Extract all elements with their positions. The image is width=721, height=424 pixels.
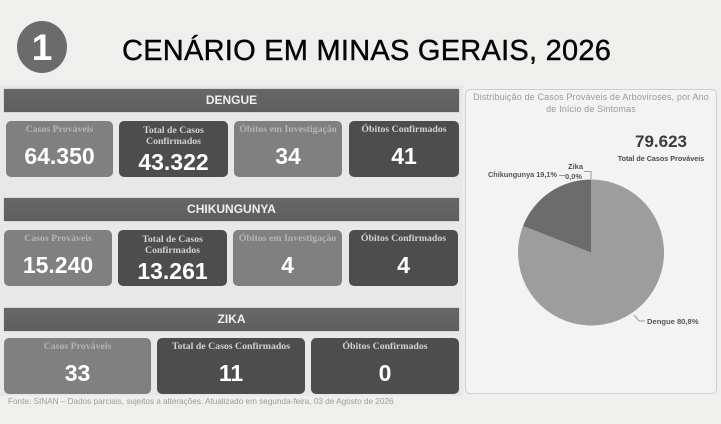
card: total confirmados	[119, 121, 228, 177]
card: óbitos em investigação	[233, 230, 342, 286]
card: casos prováveis: Casos Prováveis	[24, 233, 92, 244]
card: óbitos confirmados	[311, 338, 459, 394]
card: casos prováveis	[4, 338, 151, 394]
slice: dengue	[518, 180, 664, 326]
card: óbitos em investigação: 4	[281, 252, 294, 278]
heading: dengue: DENGUE	[206, 93, 257, 107]
card: casos prováveis: 33	[65, 360, 90, 386]
background band behind dashboard	[0, 85, 463, 396]
card: total confirmados: 43.322	[138, 149, 209, 175]
chart title: de Início de Sintomas	[546, 104, 636, 114]
card: óbitos confirmados: Óbitos Confirmados	[342, 341, 428, 352]
card: total confirmados	[157, 338, 305, 394]
source note: Fonte: SINAN – Dados parciais, sujeitos a alterações. Atualizado em segunda-feira, 03 de Agosto de 2026	[8, 397, 394, 406]
card: casos prováveis: 64.350	[24, 143, 95, 169]
card: total confirmados: Total de Casos	[143, 125, 204, 136]
card: óbitos confirmados: Óbitos Confirmados	[361, 233, 446, 244]
heading: chikungunya: CHIKUNGUNYA	[187, 202, 276, 216]
heading: zika	[4, 308, 459, 331]
heading: dengue	[4, 89, 459, 112]
panel: chikungunya cards	[4, 230, 458, 286]
total value: 79.623	[635, 132, 687, 151]
card: óbitos confirmados	[349, 121, 459, 177]
card: casos prováveis: 15.240	[23, 252, 93, 278]
card: total confirmados: 13.261	[137, 258, 208, 284]
card: óbitos confirmados	[349, 230, 458, 286]
step number badge	[17, 21, 67, 73]
card: óbitos em investigação: Óbitos em Investigação	[239, 124, 337, 135]
card: óbitos confirmados: Óbitos Confirmados	[361, 124, 447, 135]
card: óbitos em investigação: Óbitos em Investigação	[239, 233, 336, 244]
card: total confirmados: Total de Casos	[142, 234, 203, 245]
card: óbitos em investigação	[234, 121, 342, 177]
panel: zika cards	[4, 338, 459, 394]
label: dengue: Dengue 80,8%	[647, 317, 699, 326]
label: zika	[565, 162, 591, 181]
panel: distribution chart	[465, 89, 717, 394]
label: chikungunya: Chikungunya 19,1%	[488, 170, 557, 179]
card: óbitos em investigação: 34	[275, 143, 301, 169]
pie chart	[488, 162, 699, 326]
title: CENÁRIO EM MINAS GERAIS, 2026	[122, 35, 611, 67]
label: dengue	[634, 315, 699, 326]
card: total confirmados: Confirmados	[146, 136, 201, 147]
panel: dengue cards	[6, 121, 459, 177]
card: casos prováveis: Casos Prováveis	[26, 124, 93, 135]
card: casos prováveis	[4, 230, 112, 286]
chart title	[473, 92, 709, 114]
card: óbitos confirmados: 41	[391, 143, 417, 169]
card: total confirmados	[118, 230, 227, 286]
label: zika: 0,0%	[565, 172, 582, 181]
step number badge: 1	[32, 27, 52, 68]
total label: Total de Casos Prováveis	[618, 154, 704, 163]
heading: zika: ZIKA	[218, 312, 246, 326]
heading: chikungunya	[4, 198, 459, 221]
card: óbitos confirmados: 0	[379, 360, 391, 386]
card: casos prováveis: Casos Prováveis	[44, 341, 111, 352]
chart title: Distribuição de Casos Prováveis de Arboviroses, por Ano	[473, 92, 709, 102]
card: total confirmados: Confirmados	[145, 245, 200, 256]
label: zika: Zika	[568, 162, 584, 171]
card: total confirmados: 11	[219, 360, 243, 386]
slice: chikungunya	[523, 180, 591, 252]
card: óbitos confirmados: 4	[397, 252, 410, 278]
card: casos prováveis	[6, 121, 113, 177]
card: total confirmados: Total de Casos Confirmados	[172, 341, 290, 352]
